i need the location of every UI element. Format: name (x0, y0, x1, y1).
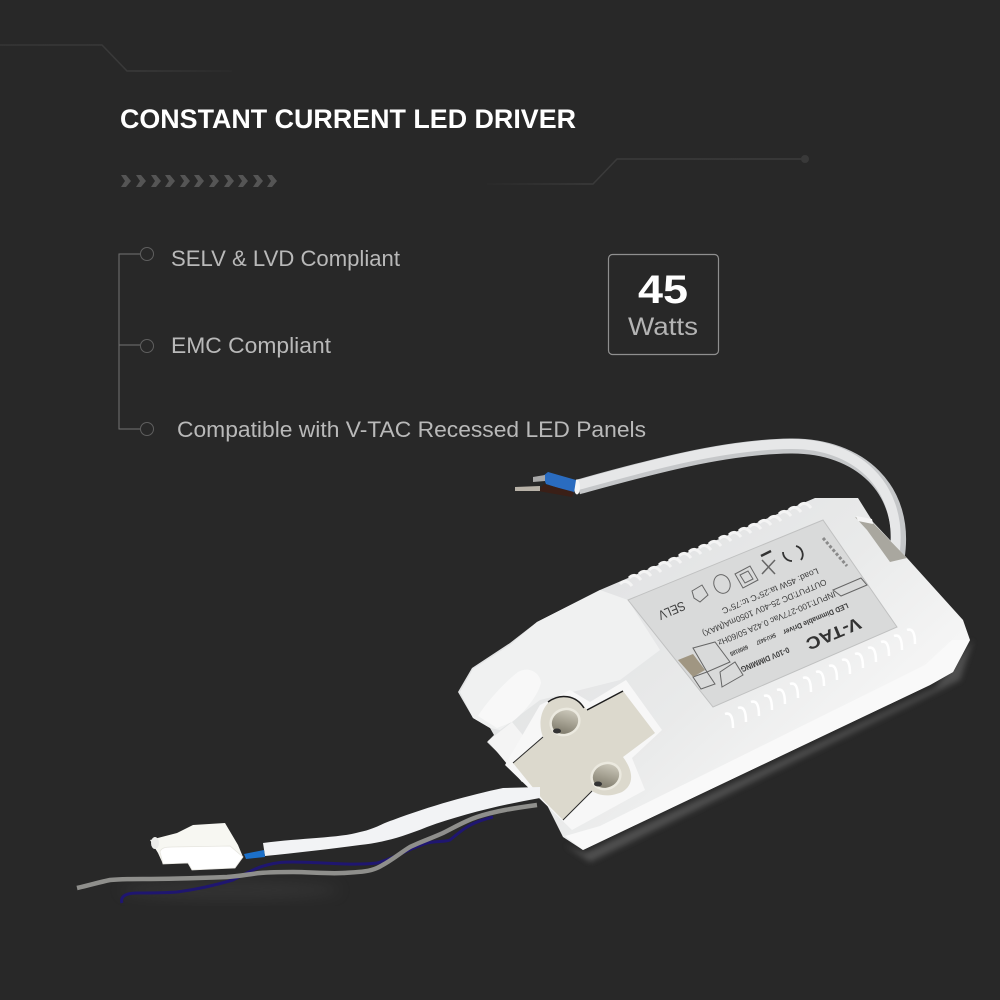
product label: OUTPUT:DC 25-40V 1050mA(MAX) (701, 577, 828, 639)
wattage badge (608, 254, 718, 354)
white plug connector (150, 823, 243, 870)
feature: EMC: EMC Compliant (171, 333, 331, 358)
screw hole: top (545, 703, 585, 741)
product label: 0-10V DIMMING (739, 645, 791, 674)
bottom edge ribs (725, 630, 915, 728)
screw hole: bottom (586, 757, 626, 795)
front edge highlight (565, 640, 970, 850)
corner clip (855, 516, 907, 562)
output cable (515, 444, 899, 558)
feature: SELV and LVD: SELV & LVD Compliant (171, 246, 400, 271)
product label: LED Dimmable Driver (782, 601, 850, 637)
decorative circuit line: top right (487, 155, 809, 184)
glow under driver (565, 640, 973, 862)
product label: 6000185 (728, 643, 749, 656)
input wire: purple (122, 817, 493, 903)
top edge ribs (620, 503, 811, 586)
product label: Load: 45W ta:25°C tc:75°C (720, 566, 820, 616)
product label: V-TAC (803, 613, 864, 653)
wattage badge: Watts (628, 313, 698, 341)
driver body (458, 498, 970, 850)
product: LED driver (77, 444, 973, 903)
input cable: white (244, 787, 540, 859)
terminal recess (505, 680, 662, 830)
product label: INPUT:100-277Vac 0.42A 50/60Hz (716, 589, 837, 648)
title: CONSTANT CURRENT LED DRIVER (120, 104, 576, 134)
input wire: grey (77, 805, 537, 888)
feature list connector (119, 248, 154, 436)
label symbols (692, 538, 867, 689)
chevron row (121, 175, 277, 187)
product label: SELV (656, 598, 688, 623)
left end block (460, 590, 660, 782)
terminal block (513, 691, 655, 820)
input cable reflection (120, 880, 340, 900)
label: brown sticker (678, 654, 705, 677)
product label (628, 520, 897, 707)
wattage badge: 45 (638, 268, 688, 312)
decorative circuit line: top left (0, 45, 232, 71)
feature: compatibility: Compatible with V-TAC Recessed LED Panels (177, 417, 646, 442)
product label: SKU:9437 (754, 631, 777, 645)
